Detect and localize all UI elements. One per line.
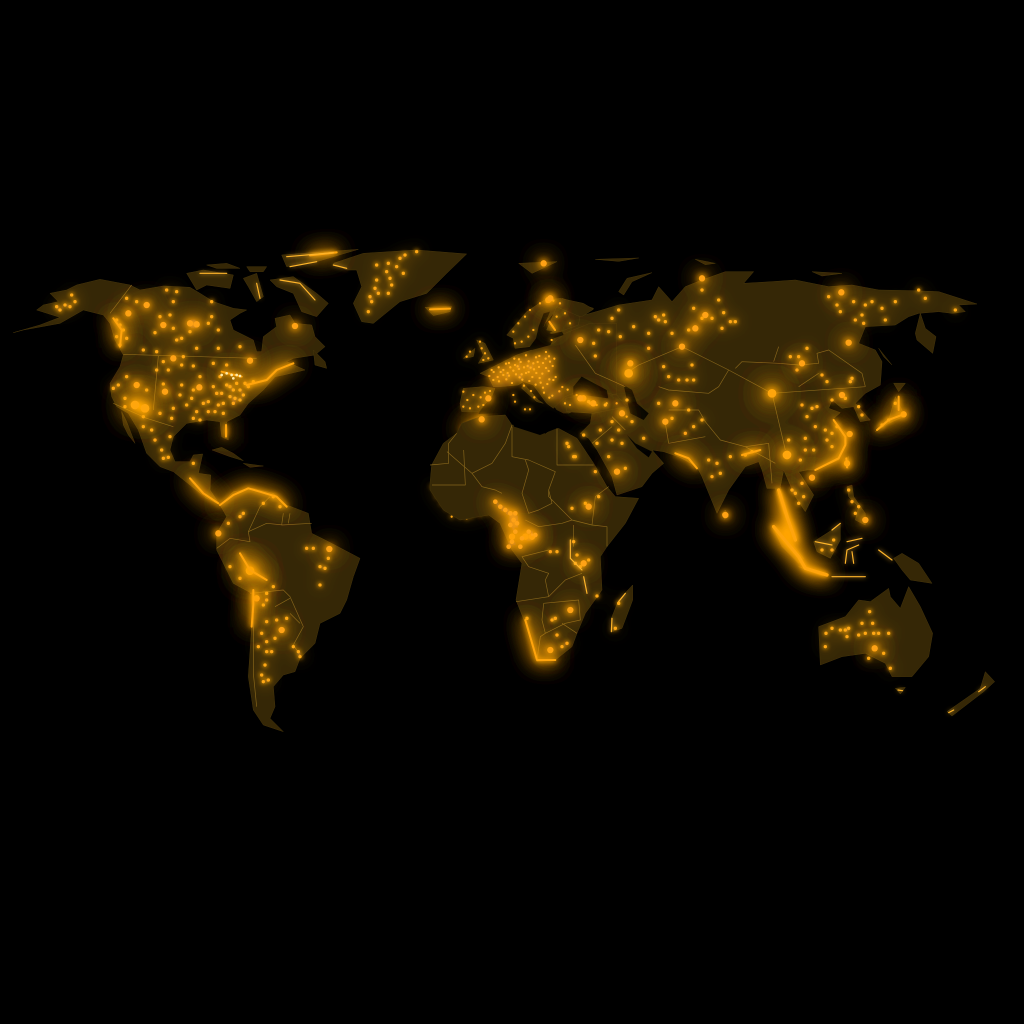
bright cluster: Nigeria and Gulf of Guinea [495, 502, 535, 547]
Europe lights [463, 300, 627, 419]
Italy [522, 383, 543, 403]
Novaya Zemlya [619, 273, 652, 295]
continental Europe [480, 323, 617, 408]
city lights: Southeast Asia [792, 483, 859, 550]
Americas and Greenland [13, 249, 487, 732]
Scandinavia [507, 298, 593, 348]
city lights: Australia [825, 612, 890, 668]
Black Sea [573, 377, 608, 398]
Australia [819, 587, 933, 677]
Canadian Arctic islands [187, 249, 358, 368]
New Zealand [947, 672, 995, 716]
Great Lakes white streak [222, 373, 240, 378]
Arctic glow [310, 252, 337, 255]
Iceland [425, 307, 452, 316]
coastal lights: West Africa [432, 487, 487, 518]
coastal glow: China, Korea and Japan [815, 397, 902, 470]
coastal glow: South America [220, 488, 287, 627]
city lights: Africa [527, 443, 619, 647]
Indonesian archipelago outlines [815, 523, 892, 577]
Finland glow [549, 322, 555, 330]
Turkey [565, 395, 627, 413]
Baltic Sea [529, 312, 564, 350]
Africa landmass [430, 415, 639, 662]
Finland [547, 307, 580, 332]
Sumatra and Java [772, 525, 827, 576]
city lights: China and East Asia [789, 348, 895, 460]
Greenland lights [368, 252, 417, 312]
city lights: Middle East and South Asia [569, 400, 752, 477]
Europe dots [463, 301, 627, 417]
Europe dense glow [487, 353, 565, 402]
Svalbard and Arctic islands [519, 258, 842, 276]
Kamchatka [915, 313, 936, 353]
Africa and Asia borders [430, 425, 609, 660]
South America landmass [217, 488, 360, 732]
coastal glow: Arabian Sea and Bengal [675, 450, 760, 468]
Iceland glow [430, 306, 450, 312]
Britain and Ireland [463, 340, 493, 363]
bright glow: Malay Peninsula and Sumatra [774, 490, 827, 575]
Sri Lanka and Taiwan [722, 457, 849, 519]
Mediterranean [478, 382, 592, 435]
national borders: Americas [110, 285, 312, 707]
North America landmass [13, 279, 325, 505]
city lights: North America [57, 290, 253, 463]
Africa, Asia and Oceania [430, 258, 995, 716]
Borneo [814, 523, 840, 558]
New Guinea [894, 553, 932, 583]
Greenland [333, 250, 467, 323]
Europe [460, 298, 627, 413]
coastal glow: southern Africa [525, 620, 555, 660]
Eurasia landmass [532, 272, 977, 517]
Madagascar [611, 585, 633, 632]
Iberia [460, 387, 495, 412]
city lights: South America [228, 497, 328, 682]
coastal outline: East Africa and Madagascar [570, 540, 625, 632]
Philippines [847, 485, 865, 525]
Persian Gulf [627, 435, 652, 457]
Tasmania and New Zealand lights [898, 687, 985, 713]
Sakhalin and Japan [875, 348, 905, 432]
Baja California [122, 412, 135, 443]
Caribbean islands [212, 447, 263, 467]
Caspian Sea [624, 385, 649, 420]
city lights: Russia and Central Asia [594, 290, 955, 380]
Tasmania [895, 687, 905, 694]
coastal glow: North America [113, 318, 293, 503]
